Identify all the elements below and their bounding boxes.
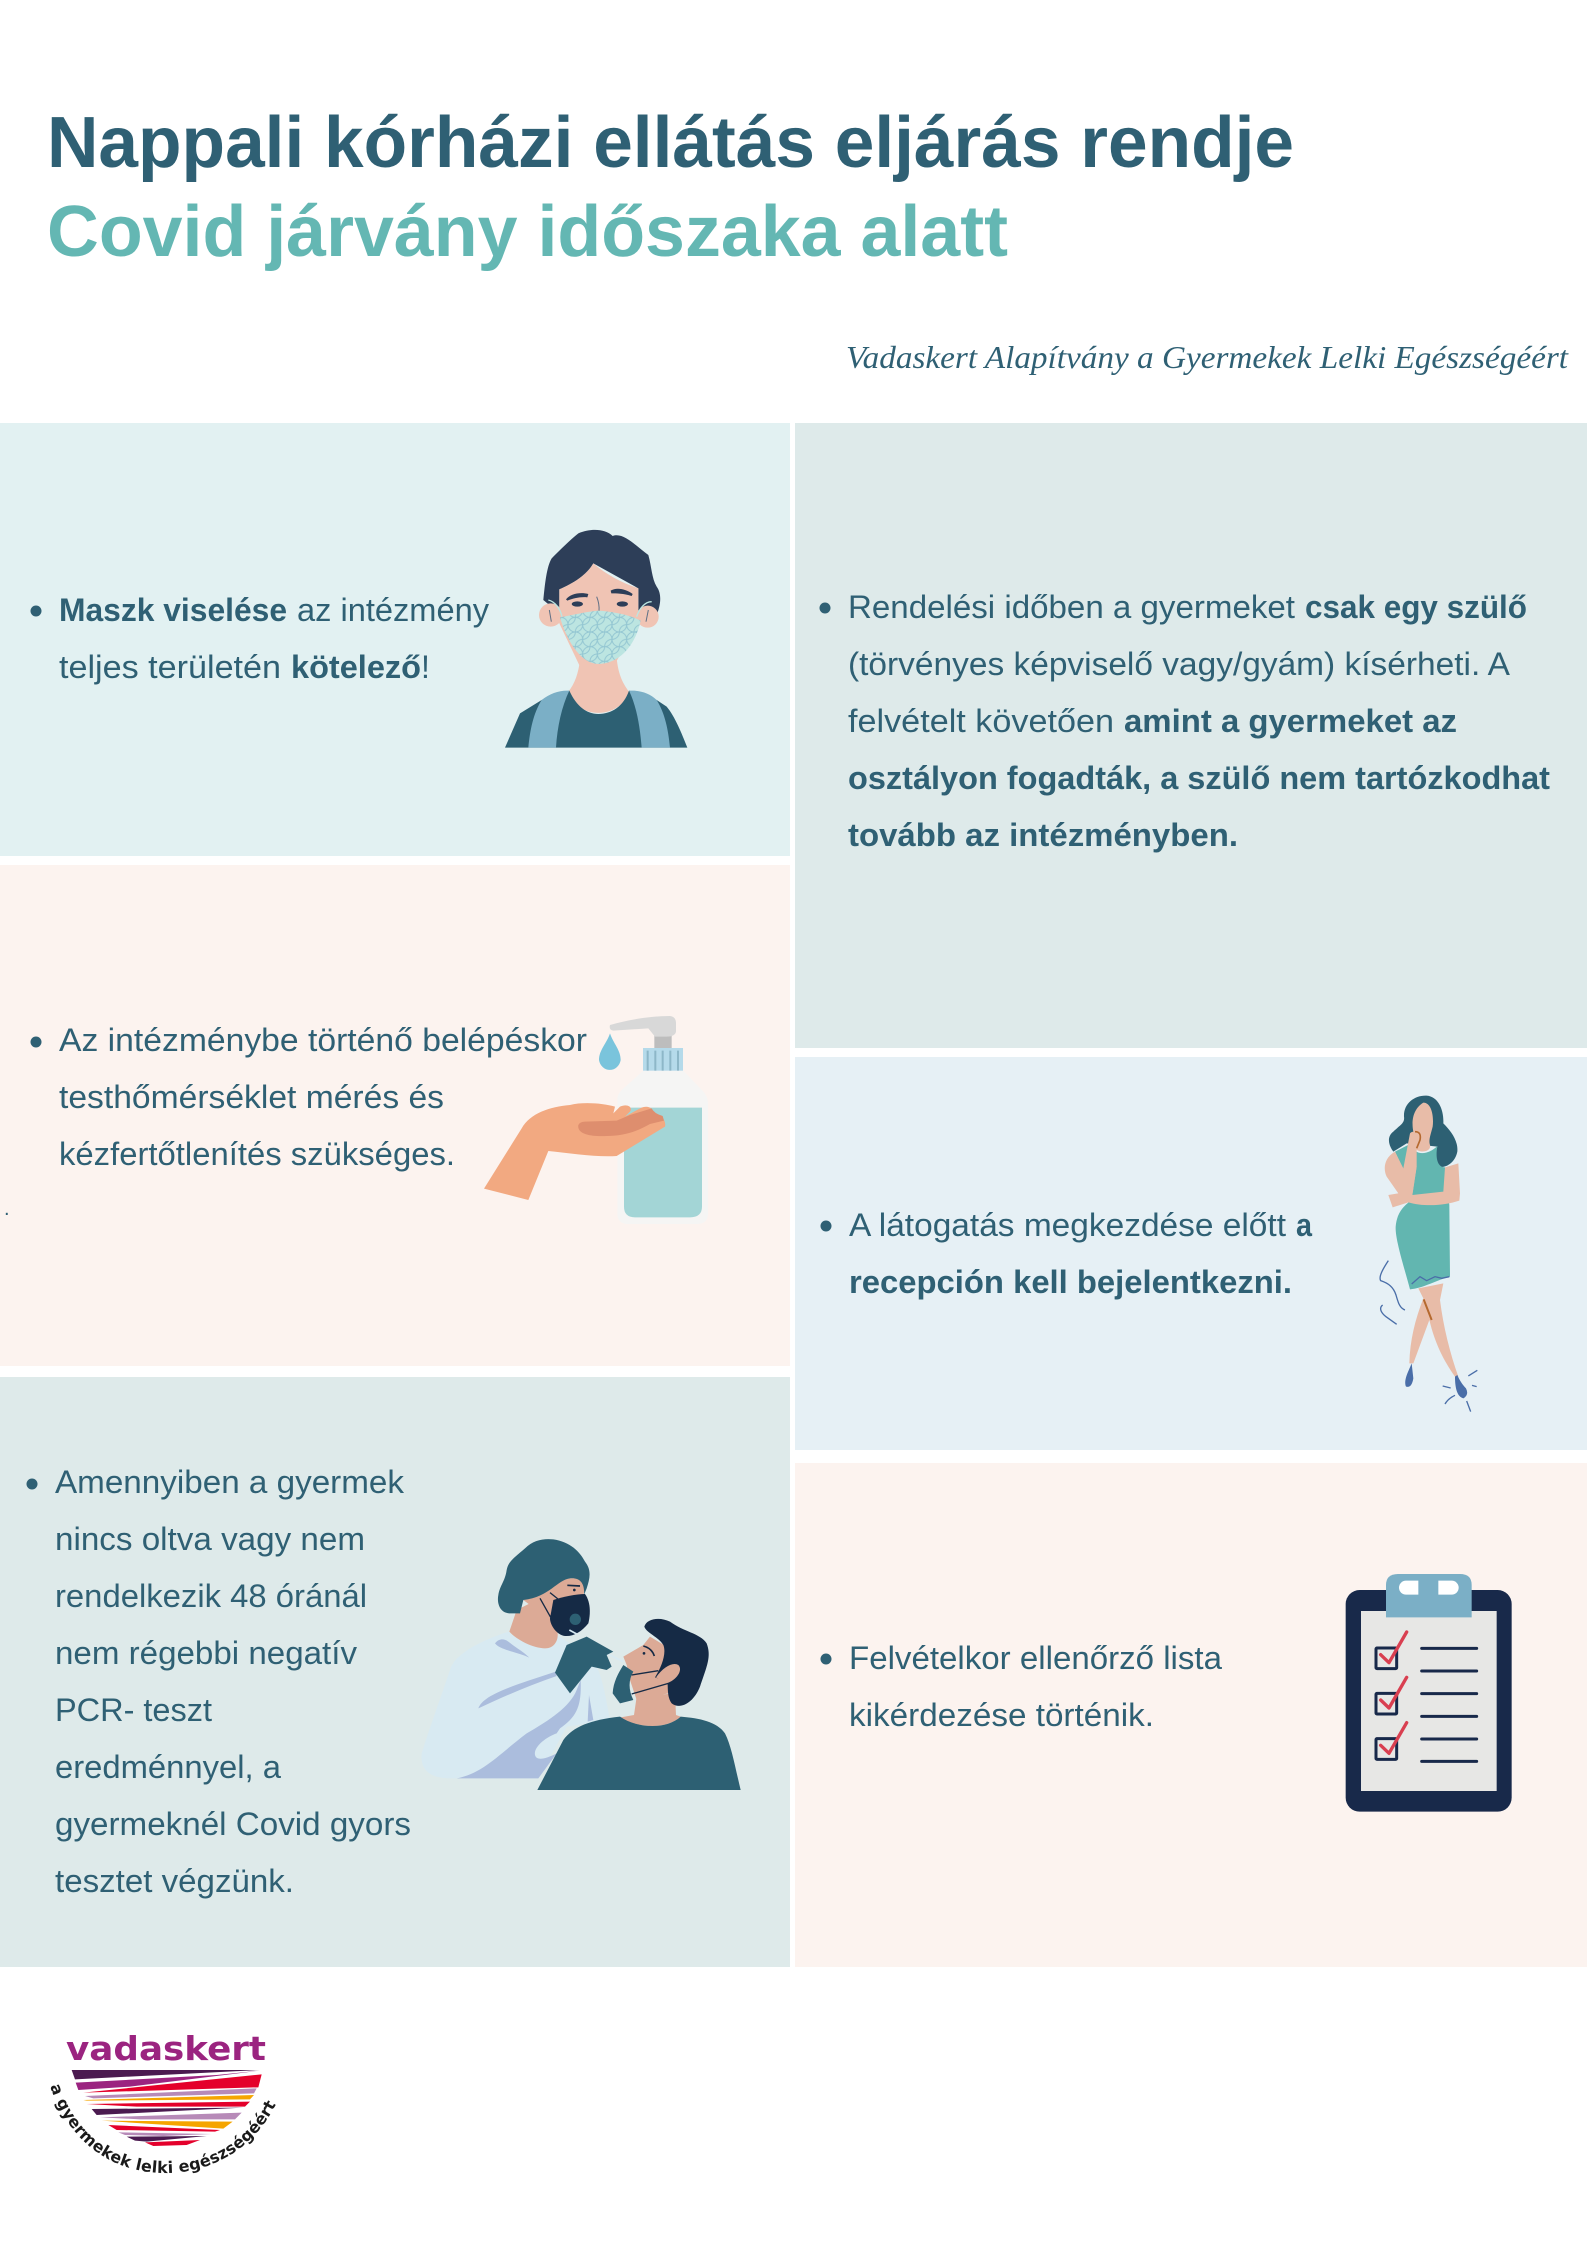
bullet text: one parent: csak egy szülő (1305, 589, 1527, 625)
bullet text: covid test: nem régebbi negatív (55, 1635, 357, 1671)
bullet text: one parent: tovább az intézményben. (848, 817, 1238, 853)
bullet text: temperature and sanitizer: kézfertőtlenítés szükséges. (59, 1136, 455, 1172)
panel: visit (795, 1057, 1587, 1450)
bullet text: reception: recepción kell bejelentkezni. (849, 1264, 1292, 1300)
bullet text: covid test: eredménnyel, a (55, 1749, 281, 1785)
bullet text: covid test: gyermeknél Covid gyors (55, 1806, 411, 1842)
bullet text: mask: Maszk viselése (59, 592, 287, 628)
bullet text: temperature and sanitizer: Az intézménybe történő belépéskor (59, 1022, 587, 1058)
panel: covid test (0, 1377, 790, 1967)
logo: vadaskert (50, 2029, 276, 2174)
bullet text: covid test: PCR- teszt (55, 1692, 212, 1728)
panel: right top text (795, 423, 1587, 1048)
bullet text: one parent (820, 589, 1550, 853)
bullet text: covid test: rendelkezik 48 óránál (55, 1578, 367, 1614)
panel: mask (0, 423, 790, 856)
bullet text: mask (30, 592, 489, 685)
bullet text: mask: az intézmény (297, 592, 489, 628)
logo curved tagline: a gyermekek lelki egészségéért (50, 2084, 276, 2174)
bullet text: covid test (26, 1464, 411, 1899)
bullet text: one parent: amint a gyermeket az (1124, 703, 1457, 739)
bullet text: reception: a (1296, 1207, 1312, 1243)
bullet text: checklist (820, 1640, 1222, 1733)
bullet text: covid test: Amennyiben a gyermek (55, 1464, 405, 1500)
bullet text: mask: teljes területén (59, 649, 281, 685)
logo wordmark: vadaskert (66, 2029, 266, 2068)
icon: clipboard checklist (1346, 1574, 1512, 1812)
panel: checklist (795, 1463, 1587, 1967)
bullet text: one parent: osztályon fogadták, a szülő nem tartózkodhat (848, 760, 1550, 796)
subtitle: Vadaskert Alapítvány a Gyermekek Lelki Egészségéért (846, 339, 1569, 375)
bullet text: temperature and sanitizer (30, 1022, 587, 1172)
title: Nappali kórházi ellátás eljárás rendje (47, 103, 1294, 183)
icon: man wearing mask (505, 530, 687, 748)
bullet text: checklist: kikérdezése történik. (849, 1697, 1154, 1733)
icon: doctor testing a patient (421, 1539, 741, 1790)
stray dot: . (4, 1198, 10, 1220)
bullet text: covid test: tesztet végzünk. (55, 1863, 294, 1899)
bullet text: mask: kötelező (291, 649, 421, 685)
bullet text: mask: ! (421, 649, 430, 685)
title: Covid járvány időszaka alatt (47, 192, 1008, 272)
icon: hand and sanitizer bottle (484, 1016, 708, 1224)
panel: sanitizer (0, 865, 790, 1366)
bullet text: checklist: Felvételkor ellenőrző lista (849, 1640, 1222, 1676)
bullet text: one parent: Rendelési időben a gyermeket (848, 589, 1295, 625)
bullet text: reception: A látogatás megkezdése előtt (849, 1207, 1286, 1243)
bullet text: temperature and sanitizer: testhőmérséklet mérés és (59, 1079, 444, 1115)
icon: woman (1380, 1096, 1477, 1412)
logo bowl stripes (72, 2070, 262, 2146)
bullet text: reception (820, 1207, 1312, 1300)
bullet text: covid test: nincs oltva vagy nem (55, 1521, 365, 1557)
title (47, 103, 1294, 272)
bullet text: one parent: felvételt követően (848, 703, 1114, 739)
bullet text: one parent: (törvényes képviselő vagy/gyám) kísérheti. A (848, 646, 1511, 682)
